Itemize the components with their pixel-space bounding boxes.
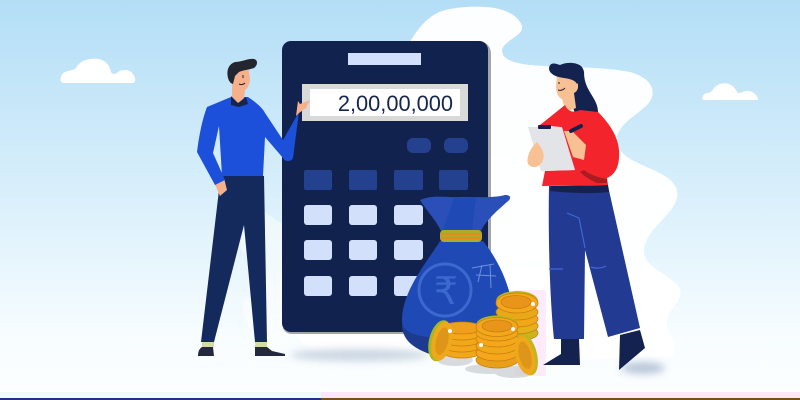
bottom band right [321, 392, 800, 400]
white blob [280, 7, 681, 362]
money bag [402, 195, 513, 354]
sleeve shade [580, 170, 607, 183]
woman hair back [572, 72, 598, 113]
function buttons [304, 170, 468, 190]
woman hair top [549, 63, 584, 84]
coin stack middle [476, 316, 518, 368]
rupee emblem [419, 264, 471, 316]
calculator side shadow [283, 41, 491, 334]
small buttons [407, 138, 468, 153]
coin stack left [442, 322, 482, 358]
number buttons [304, 205, 423, 296]
man collar [231, 96, 248, 107]
coin shadows [437, 354, 534, 378]
calculator [282, 41, 491, 334]
man hand in pocket [214, 178, 227, 196]
woman sweater [540, 105, 619, 186]
faint left lobe [232, 200, 290, 345]
woman hands and pen [527, 126, 586, 167]
bottom band left [0, 392, 321, 400]
rupee emblem: ₹ [434, 269, 458, 313]
man pointing hand [296, 100, 310, 116]
ground shadows [290, 349, 665, 374]
bag body [402, 241, 513, 354]
calculator body [282, 41, 488, 332]
woman [527, 63, 645, 370]
bag rope [440, 230, 482, 242]
top label [348, 53, 421, 65]
coins [424, 290, 546, 378]
cloud right [702, 83, 758, 100]
woman neck and face [556, 74, 578, 112]
coin stack right [496, 291, 538, 341]
bag creases [472, 264, 496, 288]
trouser creases [549, 213, 606, 269]
woman mouth and eye [558, 82, 565, 90]
sparkles [448, 302, 535, 347]
man neck and face [232, 67, 250, 104]
man trousers [201, 176, 267, 342]
woman trousers [549, 186, 640, 339]
man eye and mouth [239, 75, 245, 85]
bag neck [420, 195, 510, 231]
upright coin right [511, 332, 542, 378]
woman boots [543, 330, 645, 370]
clipboard [528, 125, 575, 171]
upright coin left [424, 318, 457, 364]
display number: 2,00,00,000 [338, 91, 453, 116]
woman belt [550, 185, 609, 193]
man [197, 59, 310, 356]
cloud left [61, 59, 135, 83]
display [302, 84, 468, 121]
man socks and shoes [198, 342, 285, 356]
man hair [227, 59, 257, 84]
coin background tint [515, 290, 546, 376]
man sweater [197, 97, 299, 185]
